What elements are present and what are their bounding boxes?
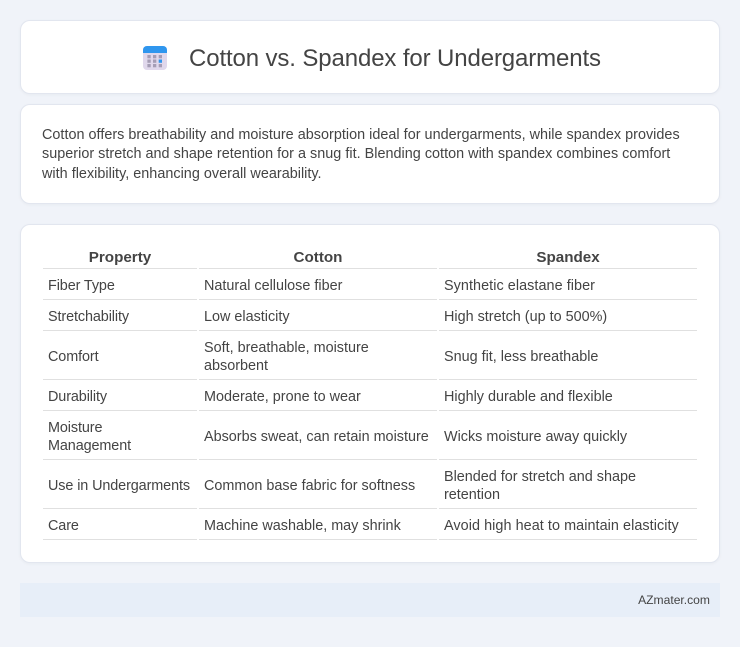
row: Comfort: Comfort [48,349,98,365]
summary paragraph: superior stretch and shape retention for a snug fit. Blending cotton with spandex combines comfort [42,146,670,162]
table header: Cotton: Cotton [294,249,342,266]
row: Stretchability [48,309,607,325]
panel: comparison table [20,224,720,563]
panel: title card [20,20,720,94]
table header: Property: Property [89,249,151,266]
row: Use in Undergarments: Common base fabric for softness [204,478,415,494]
row: Durability: Durability [48,389,107,405]
row: Moisture Management [48,420,627,454]
row: Moisture Management: Moisture [48,420,102,436]
summary paragraph: Cotton offers breathability and moisture absorption ideal for undergarments, while spandex provides [42,127,680,143]
icon: calendar [143,46,167,70]
row: Stretchability: Low elasticity [204,309,290,325]
row: Fiber Type: Synthetic elastane fiber [444,278,595,294]
summary paragraph [42,127,680,182]
row: Comfort [48,340,598,374]
row: Use in Undergarments: Use in Undergarments [48,478,190,494]
row: Stretchability: High stretch (up to 500%) [444,309,607,325]
row: Comfort: Soft, breathable, moisture [204,340,369,356]
row: Durability: Moderate, prone to wear [204,389,361,405]
row: Care: Avoid high heat to maintain elasticity [444,518,679,534]
row: Moisture Management: Wicks moisture away quickly [444,429,627,445]
row: Durability [48,389,613,405]
row: Fiber Type: Fiber Type [48,278,115,294]
row: Care: Care [48,518,79,534]
row: Comfort: absorbent [204,358,268,374]
row: Moisture Management: Absorbs sweat, can retain moisture [204,429,429,445]
table header: Spandex: Spandex [536,249,600,266]
row: Use in Undergarments: retention [444,487,500,503]
title: Cotton vs. Spandex for Undergarments [189,45,601,72]
row: Fiber Type [48,278,595,294]
footer credit: AZmater.com [638,593,710,607]
summary paragraph: with flexibility, enhancing overall wearability. [42,166,322,182]
row: Care [48,518,679,534]
row: Use in Undergarments: Blended for stretch and shape [444,469,636,485]
row: Durability: Highly durable and flexible [444,389,613,405]
row: Use in Undergarments [48,469,636,503]
row: Moisture Management: Management [48,438,131,454]
row: Fiber Type: Natural cellulose fiber [204,278,342,294]
row: Comfort: Snug fit, less breathable [444,349,598,365]
row: Care: Machine washable, may shrink [204,518,401,534]
footer bar [20,583,720,617]
row: Stretchability: Stretchability [48,309,129,325]
panel: summary text [20,104,720,204]
